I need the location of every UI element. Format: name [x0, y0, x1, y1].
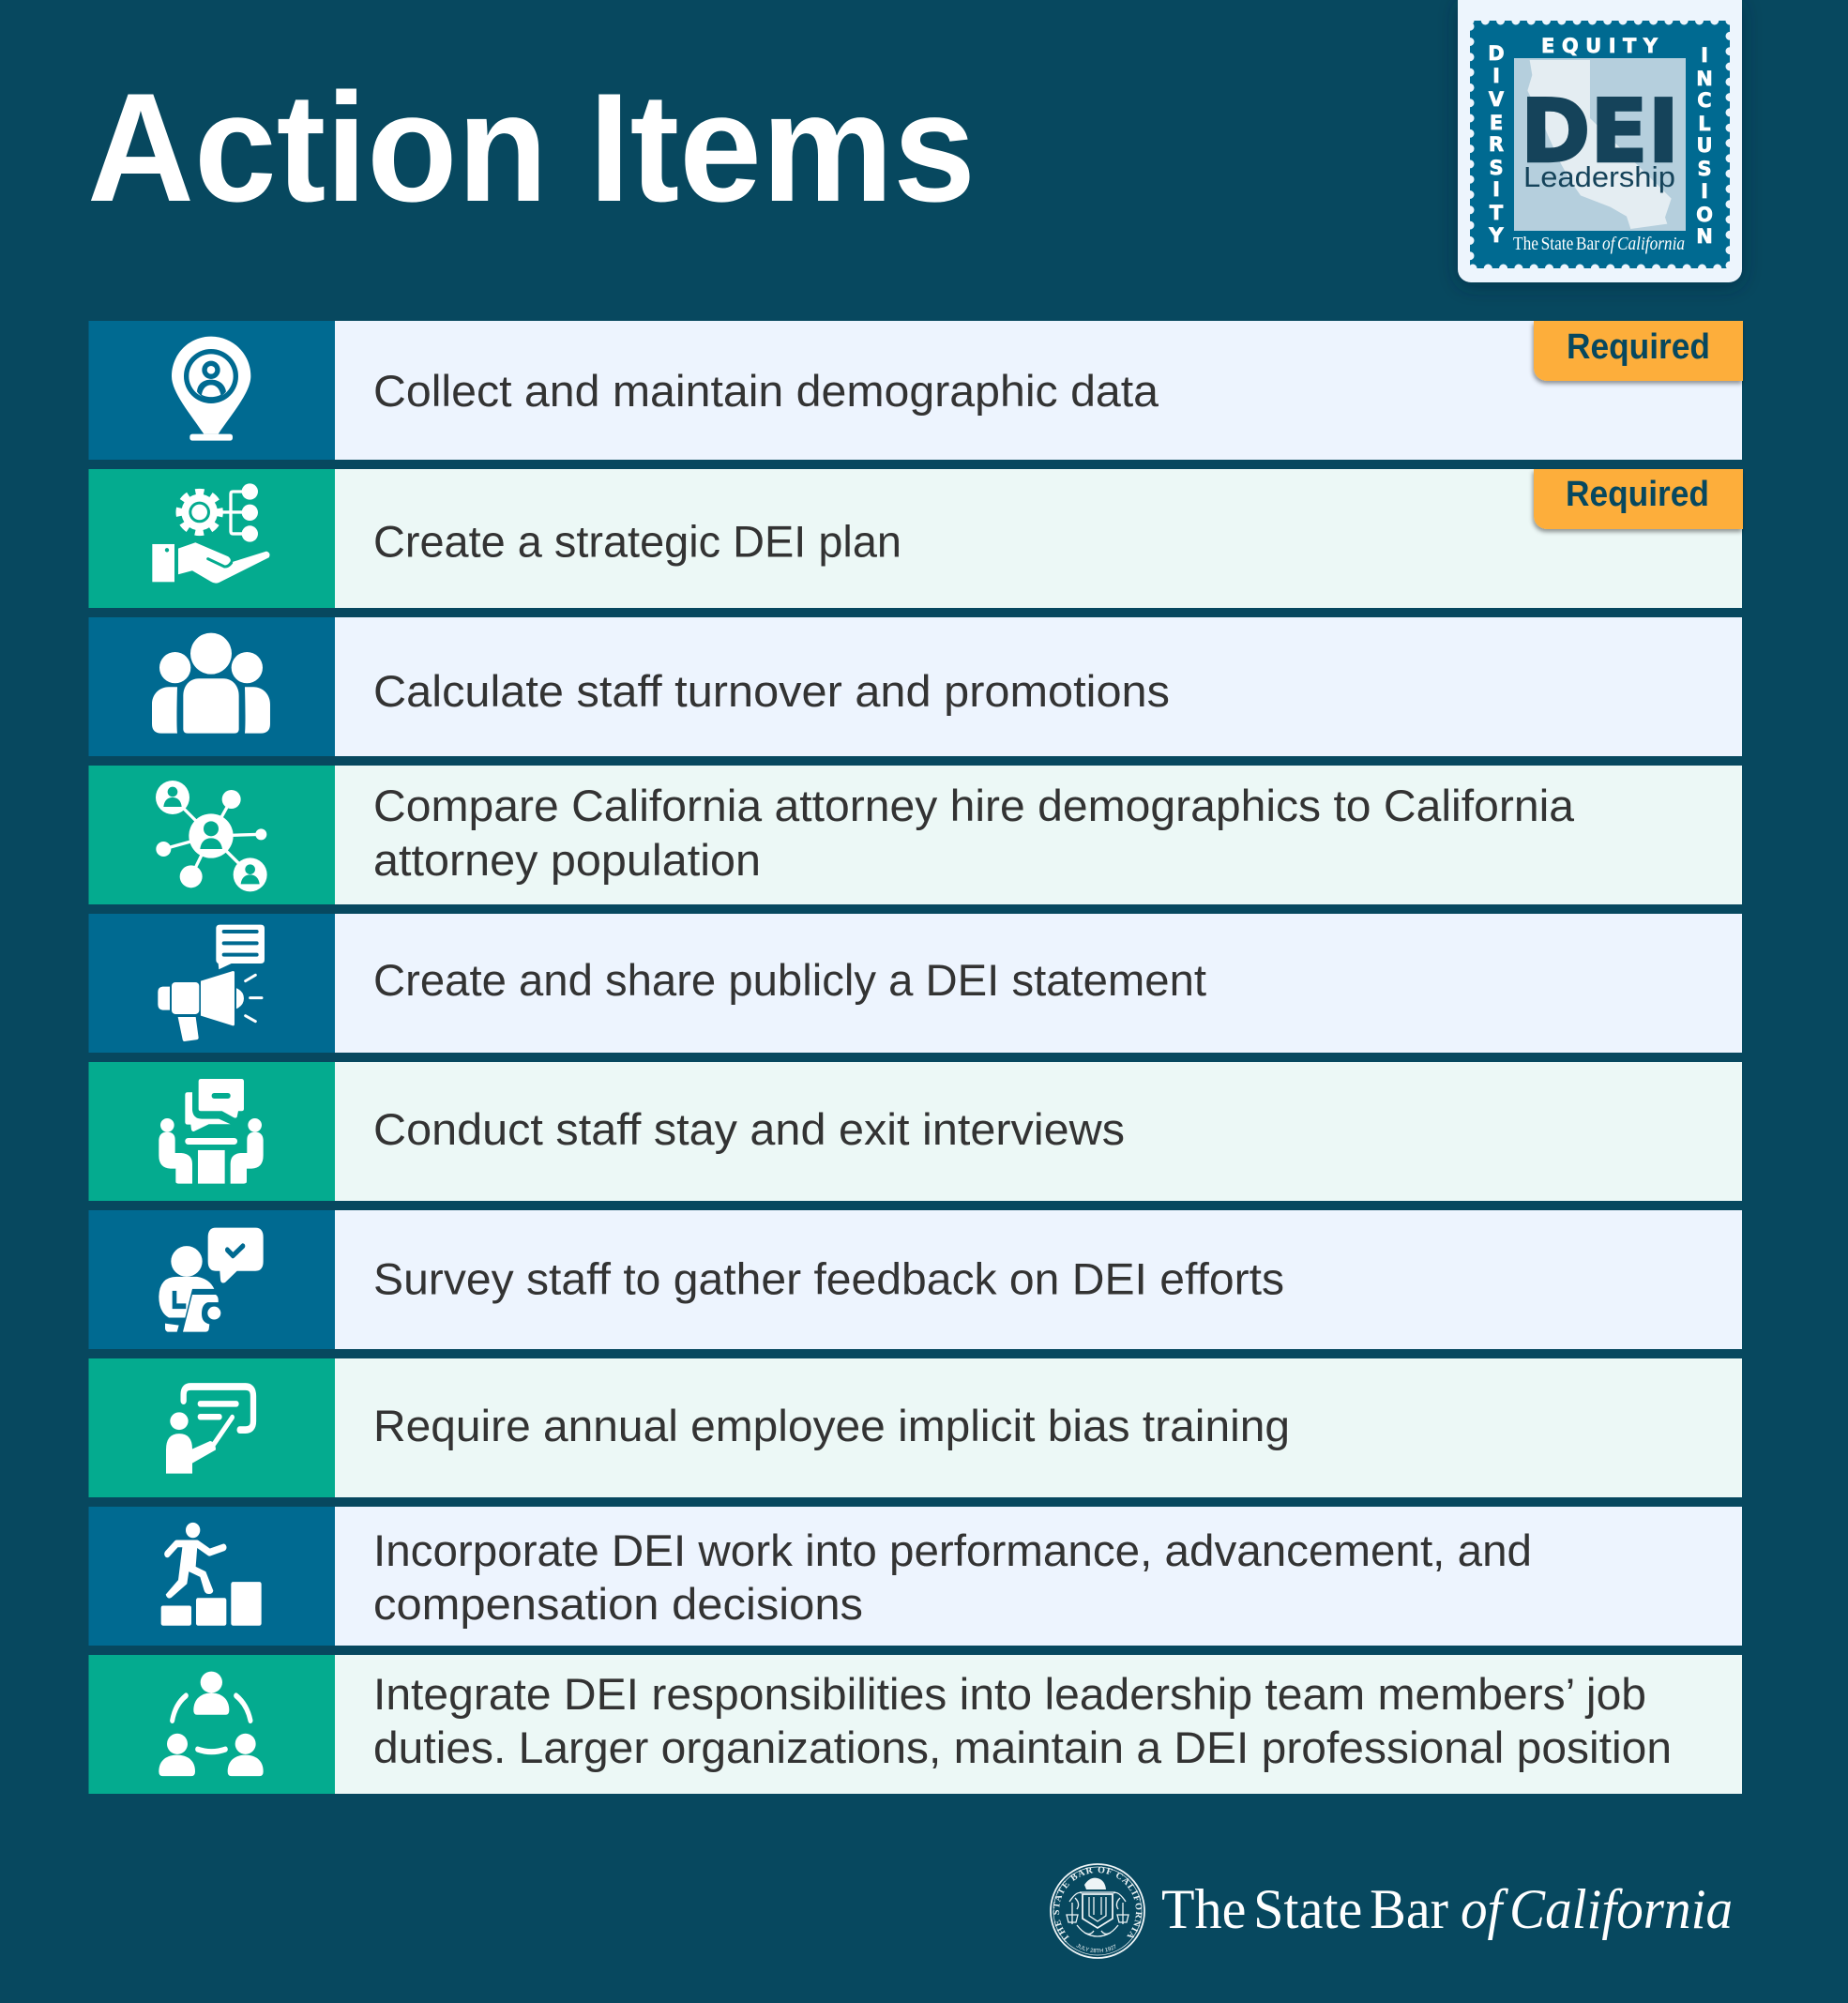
stamp word: Diversity: E: [1490, 112, 1503, 134]
stamp credit line: of California: [1602, 234, 1685, 254]
stamp word: Diversity: Y: [1488, 224, 1504, 247]
footer wordmark: of California: [1461, 1878, 1733, 1940]
stamp word: Diversity: R: [1489, 133, 1504, 156]
required tag: [1534, 469, 1743, 529]
stamp word: Inclusion: [1696, 44, 1713, 248]
stamp word: Inclusion: N: [1696, 68, 1713, 90]
logo card: [1458, 0, 1742, 282]
stamp word: Diversity: D: [1488, 42, 1505, 65]
row background: [335, 469, 1742, 608]
icon: person climbing steps: [161, 1523, 262, 1626]
row 6: [88, 1062, 1742, 1201]
icon: location pin with person: [172, 337, 250, 441]
text: compensation decisions: [373, 1580, 863, 1630]
row background: [335, 617, 1742, 756]
text: Integrate DEI responsibilities into leadership team members’ job: [373, 1670, 1646, 1720]
row 10: [88, 1655, 1742, 1794]
required tag: Required: [1566, 475, 1709, 514]
stamp word: Diversity: [1488, 42, 1505, 247]
text: Incorporate DEI work into performance, advancement, and: [373, 1526, 1532, 1576]
title: Action Items: [87, 61, 976, 234]
stamp word: Diversity: V: [1489, 88, 1505, 111]
icon: two people talking at table: [159, 1079, 264, 1184]
text: Survey staff to gather feedback on DEI efforts: [373, 1255, 1284, 1304]
footer logo: State Bar seal: THE STATE BAR OF CALIFORNIA: [1053, 1867, 1143, 1942]
DEI wordmark: DEI: [1521, 81, 1679, 182]
text: Create a strategic DEI plan: [373, 518, 901, 567]
stamp word: Inclusion: O: [1696, 204, 1713, 226]
text: attorney population: [373, 836, 761, 886]
Leadership wordmark: Leadership: [1523, 160, 1675, 193]
text: [373, 1526, 1532, 1630]
stamp perforations: [1470, 21, 1730, 268]
icon panel: [88, 914, 335, 1053]
stamp word: Diversity: S: [1489, 157, 1504, 179]
stamp word: Inclusion: S: [1697, 158, 1712, 180]
stamp word: Equity: EQUITY: [1541, 35, 1659, 57]
text: Create and share publicly a DEI statement: [373, 956, 1206, 1006]
icon: megaphone with speech bubble: [158, 925, 265, 1041]
row 5: [88, 914, 1742, 1053]
text: Compare California attorney hire demographics to California: [373, 781, 1575, 831]
stamp word: Inclusion: I: [1701, 44, 1708, 67]
text: Require annual employee implicit bias training: [373, 1402, 1290, 1451]
icon panel: [88, 1358, 335, 1497]
row background: [335, 1358, 1742, 1497]
text: Calculate staff turnover and promotions: [373, 667, 1170, 717]
icon panel: [88, 766, 335, 904]
icon panel: [88, 321, 335, 460]
icon: team circle: [159, 1672, 264, 1776]
text: Conduct staff stay and exit interviews: [373, 1105, 1125, 1155]
stamp background: [1470, 21, 1730, 268]
California silhouette: [1527, 60, 1672, 229]
footer wordmark: [1161, 1878, 1733, 1940]
row background: [335, 766, 1742, 904]
row 7: [88, 1210, 1742, 1349]
required tag: Required: [1567, 327, 1710, 367]
row background: [335, 914, 1742, 1053]
row background: [335, 1507, 1742, 1646]
footer logo: State Bar seal: JULY 28TH 1927: [1077, 1944, 1116, 1953]
icon panel: [88, 469, 335, 608]
state map square: [1514, 58, 1686, 231]
stamp credit line: The State Bar: [1513, 234, 1599, 254]
icon: people network: [156, 781, 267, 891]
stamp word: Inclusion: C: [1697, 89, 1712, 112]
icon panel: [88, 1062, 335, 1201]
icon panel: [88, 617, 335, 756]
icon panel: [88, 1210, 335, 1349]
icon: three people: [152, 633, 270, 734]
icon panel: [88, 1507, 335, 1646]
row 8: [88, 1358, 1742, 1497]
icon panel: [88, 1655, 335, 1794]
stamp word: Diversity: T: [1490, 202, 1504, 224]
row background: [335, 1655, 1742, 1794]
footer wordmark: The State Bar: [1161, 1878, 1448, 1940]
icon: trainer at board: [166, 1387, 253, 1474]
required tag: [1534, 321, 1743, 381]
icon: gear network over hand: [152, 483, 270, 584]
text: [373, 781, 1575, 886]
row 2: [88, 469, 1743, 608]
row background: [335, 321, 1742, 460]
stamp word: Diversity: I: [1492, 65, 1500, 87]
row 9: [88, 1507, 1742, 1646]
stamp word: Inclusion: I: [1701, 180, 1708, 203]
row 3: [88, 617, 1742, 756]
stamp word: Inclusion: U: [1696, 134, 1713, 157]
stamp word: Diversity: I: [1492, 178, 1500, 201]
row 4: [88, 766, 1742, 904]
logo: DEI Leadership stamp: [1458, 0, 1742, 282]
text: Collect and maintain demographic data: [373, 367, 1159, 417]
icon: person giving feedback: [159, 1228, 264, 1332]
stamp credit line: [1513, 234, 1685, 254]
row 1: [88, 321, 1743, 460]
text: [373, 1670, 1672, 1773]
stamp word: Inclusion: N: [1696, 225, 1713, 248]
stamp word: Inclusion: L: [1698, 113, 1711, 135]
row background: [335, 1210, 1742, 1349]
row background: [335, 1062, 1742, 1201]
text: duties. Larger organizations, maintain a DEI professional position: [373, 1723, 1672, 1773]
